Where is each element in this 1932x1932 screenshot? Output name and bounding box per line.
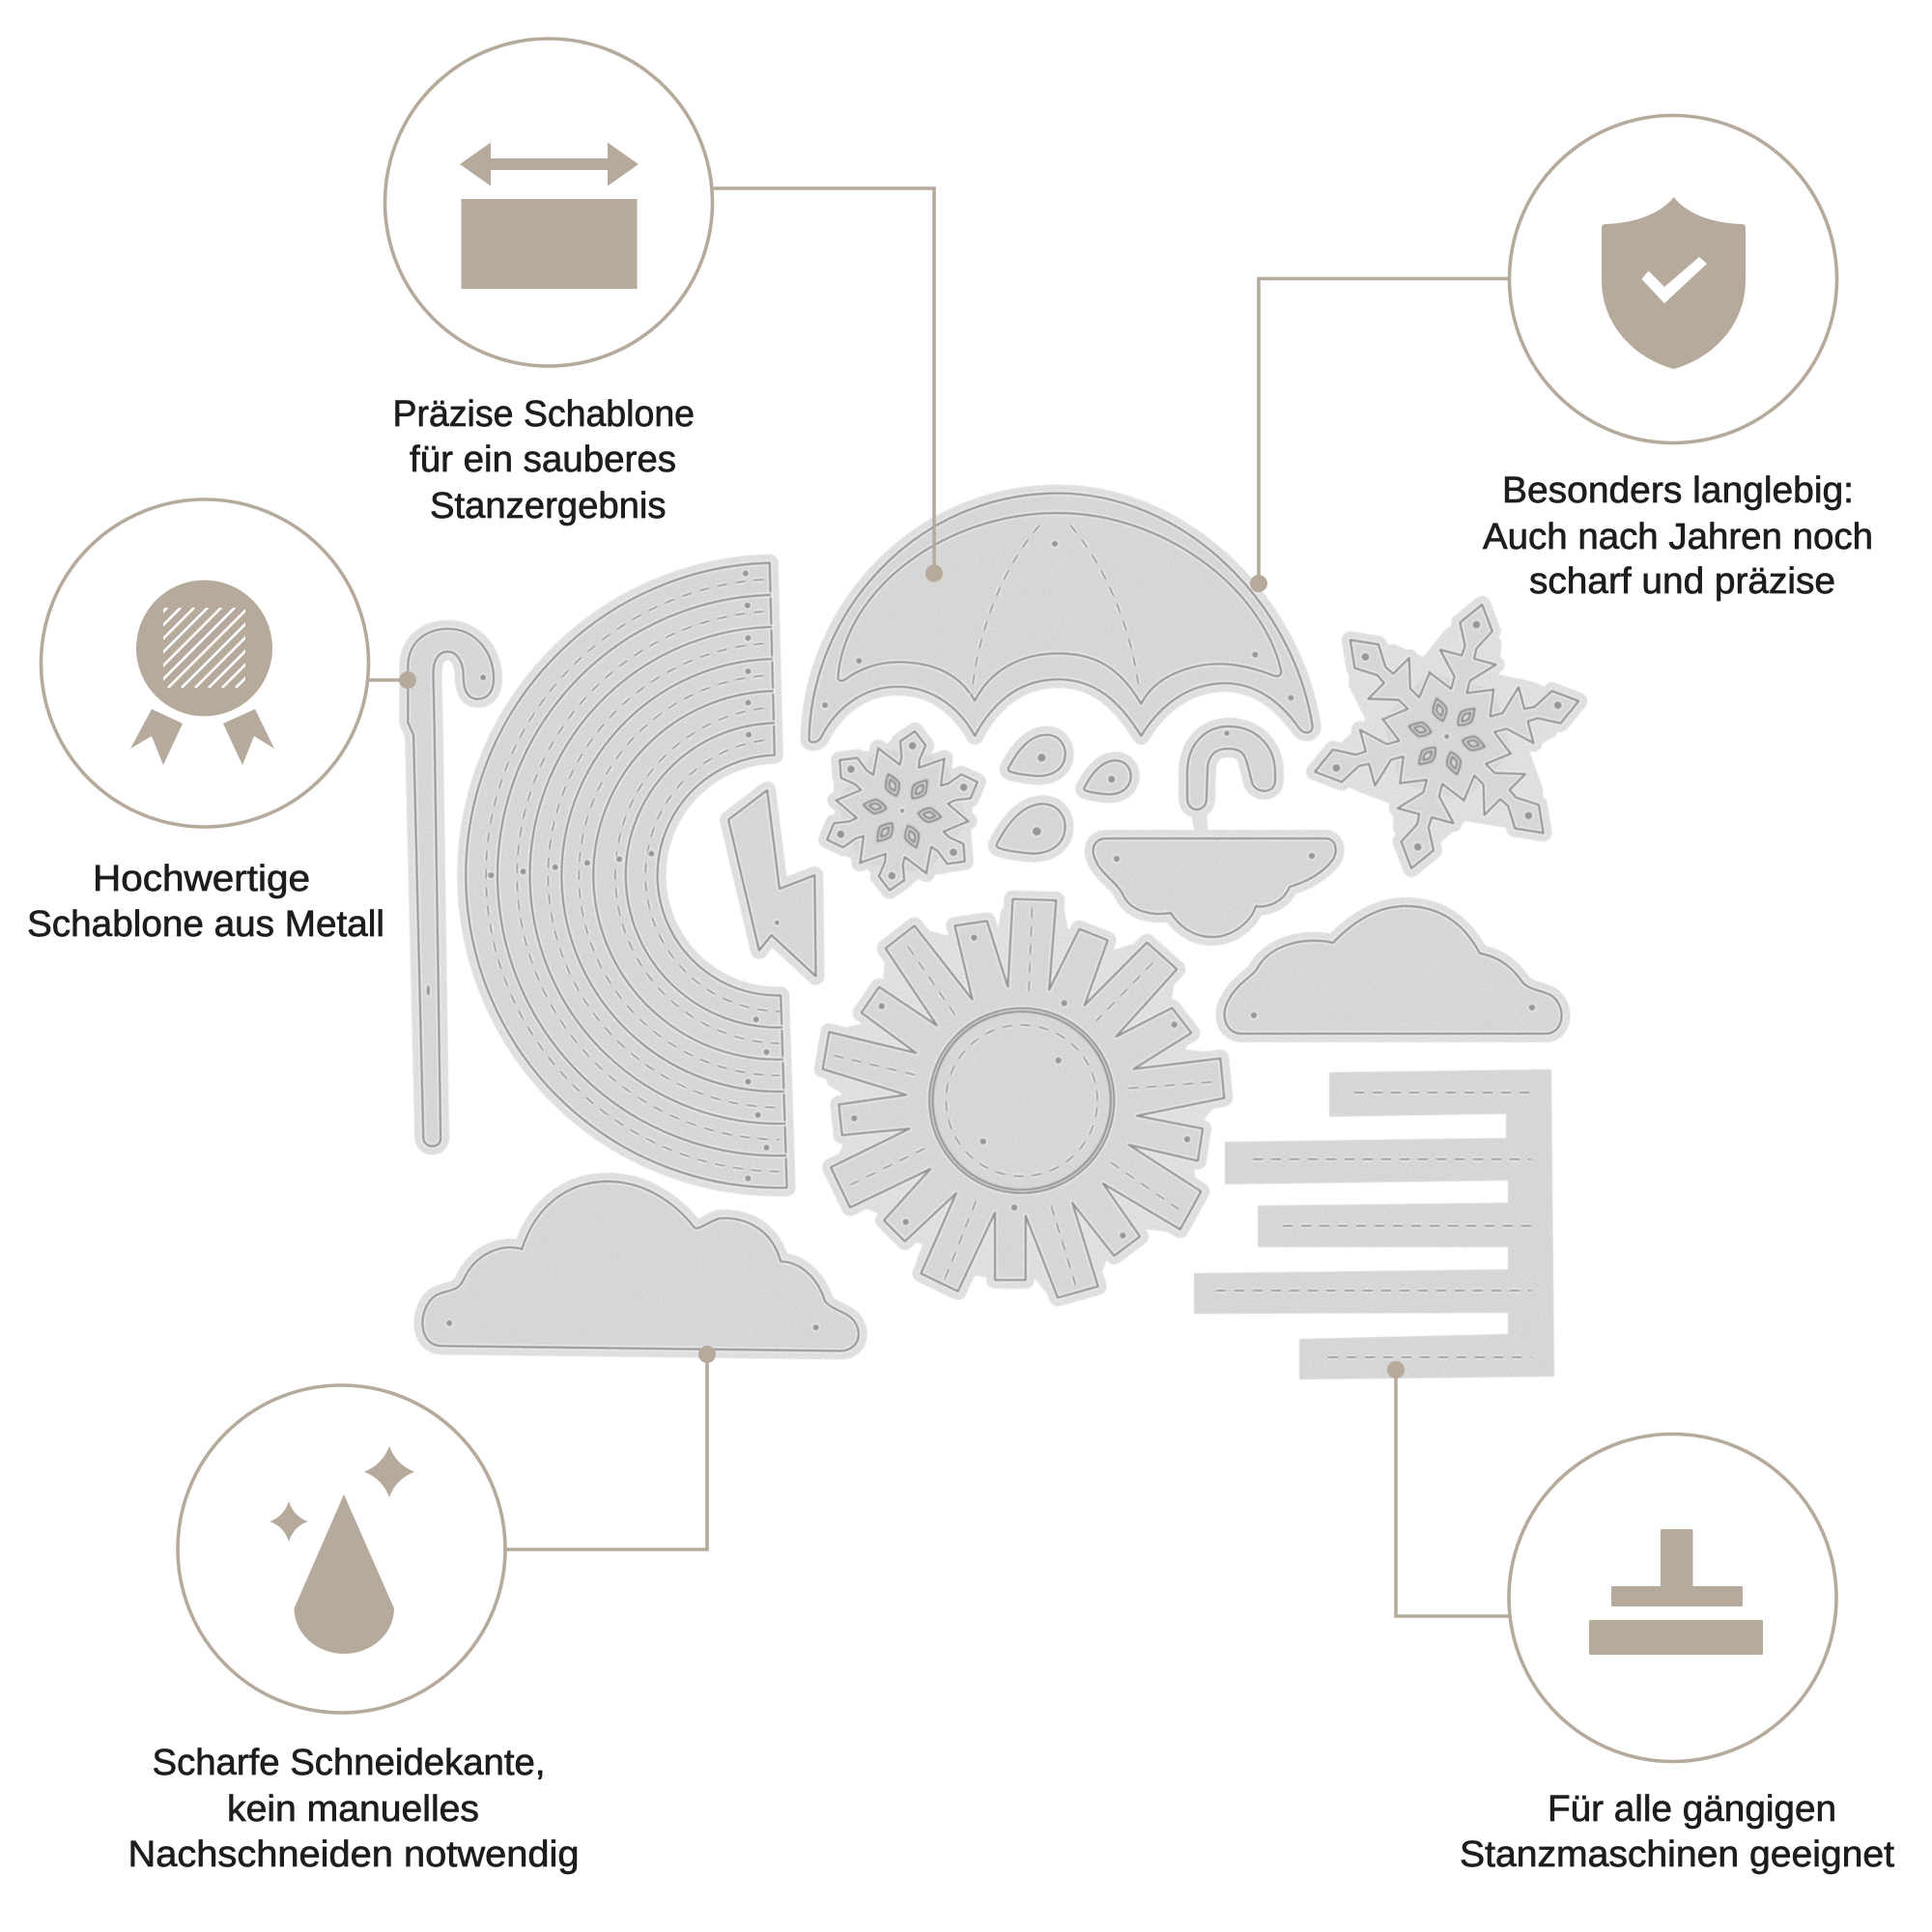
die: cane	[408, 629, 494, 1147]
callout: machines	[1387, 1361, 1894, 1875]
text: durable: Besonders langlebig:	[1502, 470, 1854, 511]
text: metal quality: Schablone aus Metall	[27, 904, 384, 945]
text: precise stencil	[392, 394, 695, 526]
connector line: precise stencil	[712, 188, 943, 582]
circle: durable	[1509, 116, 1837, 442]
text: precise stencil: für ein sauberes	[410, 440, 676, 480]
die: arch handle	[1187, 726, 1275, 835]
connector line: machines	[1387, 1361, 1509, 1616]
circle: metal quality	[41, 499, 369, 827]
text: precise stencil: Präzise Schablone	[392, 394, 695, 435]
connector line: sharp edge	[506, 1346, 716, 1549]
icon: medal with hatched square	[87, 580, 316, 765]
text: sharp edge	[128, 1743, 580, 1875]
connector line: durable	[1250, 278, 1509, 592]
icon: drop with sparkles	[270, 1446, 414, 1654]
text: durable: Auch nach Jahren noch	[1483, 517, 1873, 557]
text: sharp edge: Nachschneiden notwendig	[128, 1834, 580, 1875]
die: small snowflake	[805, 718, 1000, 904]
text: machines: Stanzmaschinen geeignet	[1460, 1834, 1894, 1875]
circle: precise stencil	[384, 39, 713, 366]
die: right cloud	[1225, 906, 1561, 1034]
die: large cloud	[422, 1181, 859, 1350]
callout: durable	[1250, 116, 1873, 602]
text: metal quality	[27, 859, 384, 945]
die: half cloud	[1094, 838, 1336, 937]
die: rain drops	[997, 735, 1131, 854]
die: large snowflake	[1281, 570, 1612, 903]
die: wind strips	[1195, 1070, 1553, 1378]
callout: sharp edge	[128, 1346, 716, 1875]
circle: machines	[1509, 1434, 1836, 1762]
callout: metal quality	[27, 499, 416, 945]
die: umbrella canopy	[810, 494, 1313, 742]
die: rainbow arcs	[466, 563, 787, 1188]
icon: shield with check	[1602, 197, 1746, 369]
die: lightning bolt	[728, 790, 816, 977]
callout: precise stencil	[384, 39, 943, 582]
text: machines	[1460, 1789, 1894, 1875]
text: sharp edge: kein manuelles	[227, 1789, 479, 1830]
text: sharp edge: Scharfe Schneidekante,	[153, 1743, 545, 1783]
text: durable: scharf und präzise	[1529, 561, 1835, 602]
text: metal quality: Hochwertige	[93, 859, 310, 899]
text: precise stencil: Stanzergebnis	[430, 486, 667, 526]
text: machines: Für alle gängigen	[1548, 1789, 1836, 1830]
circle: sharp edge	[178, 1385, 505, 1713]
icon: press	[1589, 1529, 1763, 1655]
text: durable	[1483, 470, 1873, 602]
die-cut stencil set	[408, 494, 1612, 1378]
connector line: metal quality	[369, 671, 416, 689]
die: sun	[823, 899, 1224, 1297]
icon: width arrow over rectangle	[460, 143, 639, 289]
